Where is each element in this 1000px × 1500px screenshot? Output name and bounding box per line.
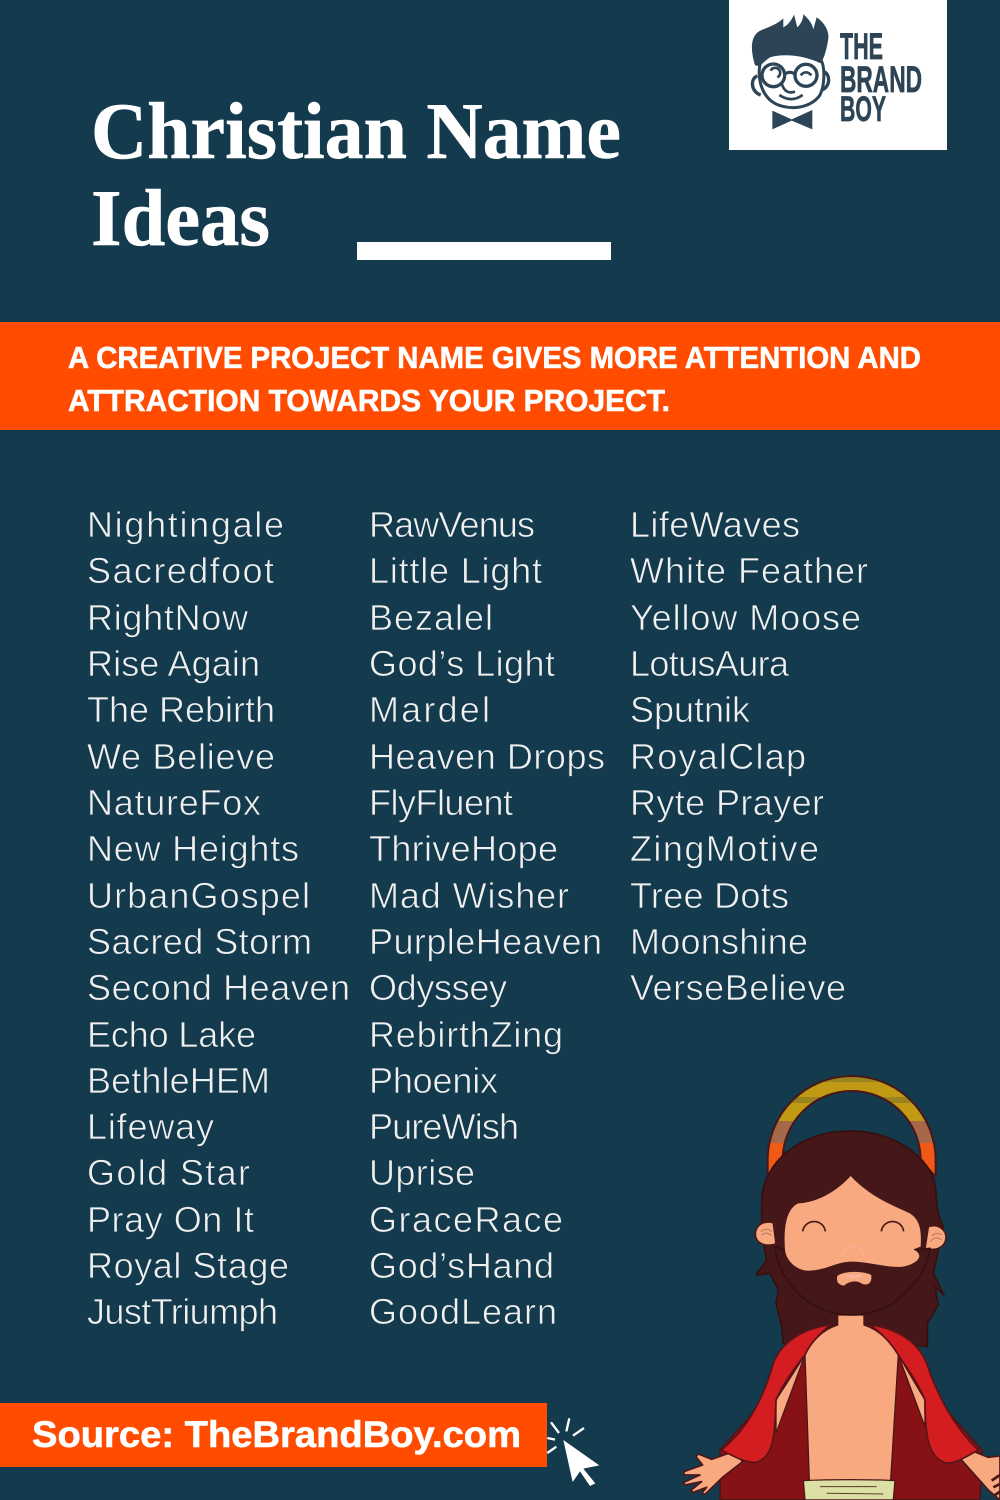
name list: column 2: Phoenix: [369, 1060, 498, 1101]
name list: column 3: Sputnik: [630, 689, 751, 730]
name list: column 2: [369, 504, 605, 1332]
name list: column 3: LotusAura: [630, 643, 790, 684]
logo: [729, 0, 947, 150]
name list: column 1: Sacred Storm: [87, 921, 312, 962]
name list: column 2: RawVenus: [369, 504, 535, 545]
torso: [805, 1315, 898, 1481]
name list: column 3: White Feather: [630, 550, 868, 591]
title: Ideas: [91, 175, 270, 263]
belt: [803, 1480, 895, 1500]
name list: column 1: BethleHEM: [87, 1060, 270, 1101]
name list: column 2: Bezalel: [369, 597, 493, 638]
name list: column 1: Nightingale: [87, 504, 284, 545]
name list: column 2: Little Light: [369, 550, 542, 591]
right fingers: [992, 1475, 1000, 1495]
name list: column 3: ZingMotive: [630, 828, 819, 869]
name list: column 1: Lifeway: [87, 1106, 214, 1147]
name list: column 1: New Heights: [87, 828, 299, 869]
red cloak: [722, 1325, 831, 1462]
name list: column 2: Odyssey: [369, 967, 507, 1008]
name list: column 1: We Believe: [87, 736, 275, 777]
name list: column 1: Echo Lake: [87, 1014, 256, 1055]
name list: column 1: Second Heaven: [87, 967, 350, 1008]
name list: column 1: [87, 504, 350, 1332]
name list: column 3: Ryte Prayer: [630, 782, 824, 823]
source bar: Source: TheBrandBoy.com: [32, 1414, 521, 1455]
name list: column 2: Mad Wisher: [369, 875, 569, 916]
icon: logo boy: [752, 14, 829, 129]
left hand: [683, 1452, 743, 1494]
logo wordmark: [840, 26, 922, 129]
source bar: [0, 1403, 547, 1467]
banner: [0, 322, 1000, 430]
name list: column 3: Yellow Moose: [630, 597, 861, 638]
halo: [768, 1076, 936, 1177]
name list: column 3: LifeWaves: [630, 504, 800, 545]
name list: column 2: RebirthZing: [369, 1014, 563, 1055]
face: [785, 1176, 921, 1271]
name list: column 2: Heaven Drops: [369, 736, 605, 777]
name list: column 2: PureWish: [369, 1106, 519, 1147]
title underline: [357, 242, 611, 260]
title: Christian Name: [91, 88, 621, 176]
name list: column 2: GraceRace: [369, 1199, 563, 1240]
icon: cursor click: [547, 1418, 599, 1486]
name list: column 3: Tree Dots: [630, 875, 789, 916]
name list: column 1: RightNow: [87, 597, 249, 638]
name list: column 2: Uprise: [369, 1152, 475, 1193]
illustration: Jesus figure: [683, 1076, 1000, 1500]
nose: [842, 1246, 863, 1255]
beard: [775, 1247, 930, 1315]
name list: column 1: NatureFox: [87, 782, 261, 823]
logo wordmark: THE: [840, 26, 883, 67]
mouth: [837, 1272, 871, 1286]
logo wordmark: BOY: [840, 90, 886, 129]
red robe back: [720, 1355, 982, 1500]
name list: column 1: Gold Star: [87, 1152, 250, 1193]
name list: column 2: FlyFluent: [369, 782, 513, 823]
title: [91, 88, 621, 263]
name list: column 1: Royal Stage: [87, 1245, 289, 1286]
name list: column 1: Sacredfoot: [87, 550, 274, 591]
name list: column 3: Moonshine: [630, 921, 808, 962]
right arm: [960, 1451, 1000, 1500]
name list: column 1: The Rebirth: [87, 689, 275, 730]
name list: column 3: [630, 504, 868, 1008]
banner: A CREATIVE PROJECT NAME GIVES MORE ATTENTION AND: [68, 340, 921, 375]
name list: column 1: Pray On It: [87, 1199, 254, 1240]
name list: column 1: JustTriumph: [87, 1291, 278, 1332]
name list: column 1: Rise Again: [87, 643, 260, 684]
banner: ATTRACTION TOWARDS YOUR PROJECT.: [68, 383, 670, 418]
logo wordmark: BRAND: [840, 59, 922, 100]
name list: column 2: God’sHand: [369, 1245, 554, 1286]
name list: column 2: GoodLearn: [369, 1291, 557, 1332]
name list: column 2: PurpleHeaven: [369, 921, 602, 962]
inner robe skin: [776, 1355, 925, 1433]
hair: [756, 1131, 944, 1347]
name list: column 2: ThriveHope: [369, 828, 558, 869]
name list: column 2: God’s Light: [369, 643, 555, 684]
name list: column 2: Mardel: [369, 689, 490, 730]
name list: column 1: UrbanGospel: [87, 875, 310, 916]
name list: column 3: VerseBelieve: [630, 967, 846, 1008]
ears: [755, 1222, 946, 1249]
name list: column 3: RoyalClap: [630, 736, 806, 777]
eyes: [803, 1222, 904, 1231]
